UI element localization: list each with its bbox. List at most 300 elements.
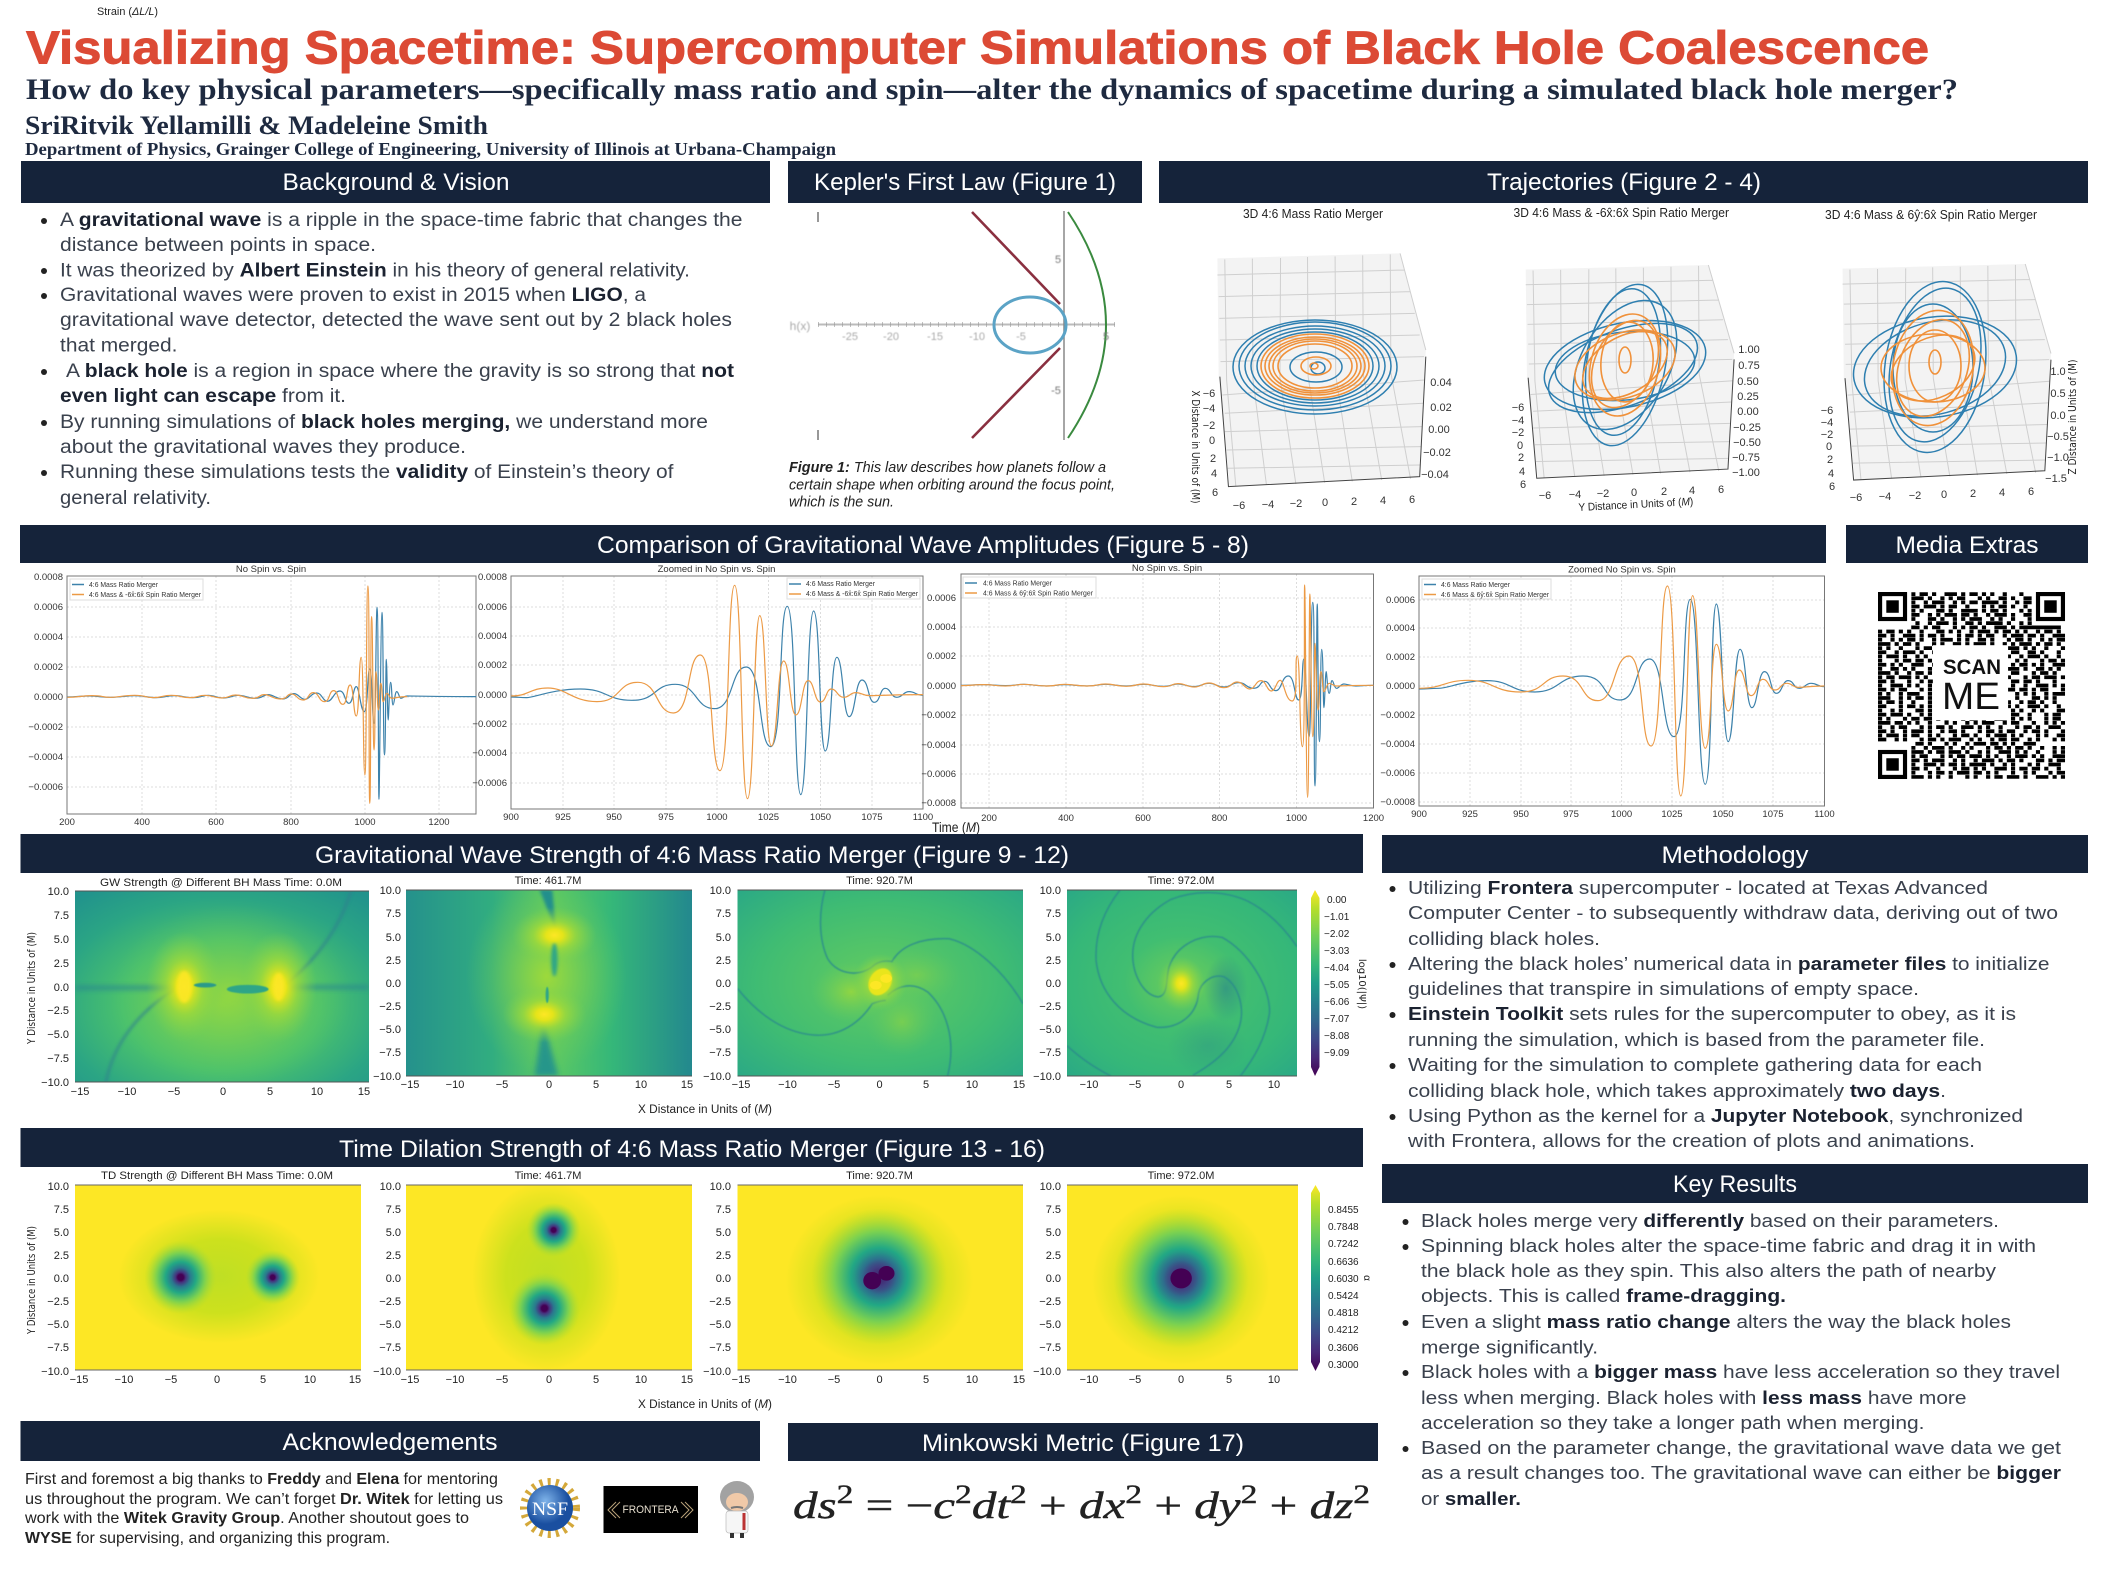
chart: 3D trajectory, orthogonal spin: 6 <box>2028 486 2034 498</box>
chart: 3D trajectory, no spin: −0.04 <box>1421 469 1449 481</box>
chart: zoomed no spin vs anti-aligned spin: 975 <box>658 812 674 823</box>
chart: zoomed no spin vs anti-aligned spin: 1100 <box>913 812 933 823</box>
subtitle: research question: How do key physical parameters—specifically mass ratio and spin—alter the dynamics of spacetime during a simulated black hole merger? <box>26 73 1958 106</box>
chart: no spin vs orthogonal spin: 600 <box>1135 813 1151 824</box>
legend: 4:6 Mass & -6x̂:6x̂ Spin Ratio Merger <box>89 590 201 599</box>
heatmap: TD t=461.7: 5 <box>593 1374 599 1386</box>
text block: background bullets: A gravitational wave is a ripple in the space-time fabric that changes the <box>60 210 742 231</box>
legend: 4:6 Mass & -6x̂:6x̂ Spin Ratio Merger <box>806 589 918 598</box>
colorbar: TD: 0.8455 <box>1328 1205 1359 1216</box>
heatmap: TD t=920.7: 5.0 <box>716 1227 731 1239</box>
heading: Minkowski metric <box>788 1423 1378 1461</box>
text block: background bullets: A black hole is a region in space where the gravity is so strong that not <box>66 361 735 382</box>
heatmap: GW t=0: 0 <box>220 1086 226 1098</box>
heatmap: GW t=0: −15 <box>71 1086 89 1098</box>
colorbar: TD: 0.6030 <box>1328 1274 1359 1285</box>
heading: trajectories: Trajectories (Figure 2 - 4) <box>1487 169 1761 196</box>
chart: no spin vs orthogonal spin: 1000 <box>1286 813 1307 824</box>
text block: thanks: WYSE for supervising, and organizing this program. <box>25 1530 390 1547</box>
chart: 3D trajectory, no spin: 4 <box>1211 468 1217 480</box>
chart: no spin vs anti-aligned spin: 600 <box>208 817 224 828</box>
chart: zoomed no spin vs anti-aligned spin: 0.0006 <box>478 602 507 613</box>
chart: no spin vs orthogonal spin: 0.0002 <box>927 651 956 662</box>
legend: 4:6 Mass & 6ŷ:6x̂ Spin Ratio Merger <box>983 588 1093 598</box>
chart: 3D trajectory, no spin: −4 <box>1262 499 1274 511</box>
chart: 3D trajectory, anti-aligned spin: Y Distance in Units of (M) <box>1578 496 1694 514</box>
icon: QR code: SCAN <box>1943 656 2001 679</box>
heatmap: TD t=972: 2.5 <box>1046 1250 1061 1262</box>
chart: 3D trajectory, no spin: X Distance in Units of (M) <box>1189 390 1201 504</box>
heading: key results: Key Results <box>1673 1171 1797 1198</box>
heading: trajectories <box>1159 161 2088 203</box>
heatmap: TD t=920.7: −5 <box>828 1374 840 1386</box>
heatmap: TD t=972: 10 <box>1268 1374 1280 1386</box>
chart: conic sections: -5 <box>1051 385 1061 397</box>
heatmap: GW t=972: −2.5 <box>1039 1001 1061 1013</box>
chart: 3D trajectory, orthogonal spin: 4 <box>1828 468 1834 480</box>
chart: zoomed no spin vs anti-aligned spin: 925 <box>555 812 571 823</box>
chart: 3D trajectory, no spin: 0.00 <box>1428 424 1450 436</box>
heatmap: TD t=920.7: 7.5 <box>716 1204 731 1216</box>
colorbar: TD: 0.6636 <box>1328 1257 1359 1268</box>
chart: zoomed no spin vs orthogonal spin: 900 <box>1411 809 1427 820</box>
heatmap: GW t=461.7: −2.5 <box>379 1001 401 1013</box>
chart: 3D trajectory, no spin: 6 <box>1409 494 1415 506</box>
text block: methodology bullets: Altering the black holes’ numerical data in parameter files to initialize <box>1408 953 2050 974</box>
chart: zoomed no spin vs anti-aligned spin <box>472 564 933 823</box>
heatmap: GW t=0: 15 <box>358 1086 370 1098</box>
colorbar: GW: 0.00 <box>1327 895 1347 906</box>
heatmap: GW t=0: −5 <box>168 1086 180 1098</box>
chart: conic sections <box>790 211 1115 440</box>
heatmap: GW t=0: 5 <box>267 1086 273 1098</box>
chart: zoomed no spin vs orthogonal spin: 1025 <box>1661 809 1683 820</box>
chart: conic sections: -20 <box>883 331 899 343</box>
colorbar: GW <box>1311 890 1367 1076</box>
equation: spacetime interval: dx <box>1079 1485 1125 1527</box>
heading: background and vision <box>21 161 770 203</box>
heatmap: TD t=920.7: −10.0 <box>703 1366 731 1378</box>
heatmap: TD t=0: TD Strength @ Different BH Mass Time: 0.0M <box>101 1170 333 1182</box>
chart: zoomed no spin vs orthogonal spin: 950 <box>1513 809 1529 820</box>
panel: methodology <box>1382 835 2088 1151</box>
panel: media extras <box>1846 525 2088 779</box>
chart: 3D trajectory, anti-aligned spin: 0.75 <box>1738 360 1760 372</box>
heatmap: TD t=0: −5 <box>165 1374 177 1386</box>
legend: 4:6 Mass Ratio Merger <box>89 580 158 589</box>
heatmap: TD t=920.7: −10 <box>778 1374 797 1386</box>
chart: zoomed no spin vs anti-aligned spin: 0.0002 <box>478 660 507 671</box>
heading: acknowledgements <box>20 1421 760 1461</box>
chart: 3D trajectory, no spin: 3D 4:6 Mass Ratio Merger <box>1243 207 1383 221</box>
chart: zoomed no spin vs orthogonal spin: 1100 <box>1814 809 1835 820</box>
chart: 3D trajectory, orthogonal spin: 3D 4:6 Mass & 6ŷ:6x̂ Spin Ratio Merger <box>1825 208 2037 222</box>
chart: 3D trajectory, orthogonal spin: −6 <box>1850 492 1862 504</box>
colorbar: TD: 0.4818 <box>1328 1308 1359 1319</box>
equation: spacetime interval: = − <box>853 1485 933 1527</box>
heatmap: GW t=972: 0 <box>1178 1079 1184 1091</box>
chart: 3D trajectory, orthogonal spin: 6 <box>1829 481 1835 493</box>
chart: 3D trajectory, orthogonal spin: −1.0 <box>2047 452 2069 464</box>
heading: TD strength <box>20 1128 1363 1167</box>
heatmap: GW t=972 <box>1033 875 1297 1091</box>
panel: key results <box>1382 1164 2088 1509</box>
heatmap: TD t=461.7 <box>373 1170 693 1386</box>
heatmap: GW t=0: 2.5 <box>54 958 69 970</box>
authors: SriRitvik Yellamilli & Madeleine Smith <box>25 111 489 140</box>
colorbar: GW: log10(|Ψ|) <box>1356 959 1367 1009</box>
heatmap: GW t=920.7: −2.5 <box>709 1001 731 1013</box>
chart: 3D trajectory, no spin: −6 <box>1203 388 1215 400</box>
heatmap: GW t=0: 7.5 <box>54 910 69 922</box>
colorbar: TD: 0.3000 <box>1328 1360 1359 1371</box>
chart: no spin vs anti-aligned spin: −0.0006 <box>28 782 63 793</box>
equation: spacetime interval: 2 <box>1125 1480 1142 1509</box>
legend <box>787 578 920 599</box>
text block: key results bullets: Even a slight mass ratio change alters the way the black holes <box>1421 1311 2011 1332</box>
chart: no spin vs anti-aligned spin: 0.0006 <box>34 602 63 613</box>
heatmap: TD t=0: Y Distance in Units of (M) <box>26 1226 38 1335</box>
caption: figure 1: Figure 1: This law describes how planets follow a <box>789 460 1106 476</box>
heatmap: GW t=920.7 <box>703 875 1025 1091</box>
icon: Einstein cartoon <box>720 1481 754 1538</box>
heatmap: TD t=0: 0.0 <box>54 1273 69 1285</box>
heatmap: TD t=920.7: −15 <box>732 1374 750 1386</box>
heatmap: GW t=461.7: −10.0 <box>373 1071 401 1083</box>
chart: 3D trajectory, orthogonal spin: 4 <box>1999 487 2005 499</box>
chart: zoomed no spin vs orthogonal spin: −0.0006 <box>1380 768 1415 779</box>
heatmap: GW t=920.7: −15 <box>732 1079 750 1091</box>
heatmap: TD t=461.7: 5.0 <box>386 1227 401 1239</box>
text block: background bullets: that merged. <box>60 336 178 356</box>
chart: zoomed no spin vs anti-aligned spin: 0.0004 <box>478 631 507 642</box>
caption: figure 1 <box>789 460 1115 510</box>
axis label: time: Time (M) <box>932 819 980 835</box>
heading: GW strength: Gravitational Wave Strength of 4:6 Mass Ratio Merger (Figure 9 - 12) <box>315 842 1069 869</box>
chart: 3D trajectory, orthogonal spin: 2 <box>1827 454 1833 466</box>
heatmap: TD t=972: −5 <box>1129 1374 1141 1386</box>
heatmap: TD t=920.7: −5.0 <box>709 1319 731 1331</box>
heatmap: GW t=461.7: −10 <box>446 1079 464 1091</box>
chart: no spin vs anti-aligned spin: 1200 <box>428 817 450 828</box>
chart: 3D trajectory, orthogonal spin: −6 <box>1821 405 1833 417</box>
chart: 3D trajectory, orthogonal spin: −4 <box>1821 417 1833 429</box>
chart: 3D trajectory, anti-aligned spin: 0 <box>1517 440 1523 452</box>
chart: zoomed no spin vs orthogonal spin: −0.0008 <box>1380 797 1415 808</box>
equation: spacetime interval: c <box>933 1485 955 1527</box>
heatmap: GW t=0: −5.0 <box>47 1029 69 1041</box>
heatmap: GW t=0: Y Distance in Units of (M) <box>26 932 38 1045</box>
heatmap: GW t=972: −10.0 <box>1033 1071 1061 1083</box>
equation: spacetime interval: + <box>1142 1485 1194 1527</box>
chart: no spin vs anti-aligned spin: 800 <box>283 817 299 828</box>
heatmap: TD t=0: 15 <box>349 1374 361 1386</box>
chart: 3D trajectory, no spin: 0 <box>1209 435 1215 447</box>
chart: conic sections: h(x) <box>790 319 810 333</box>
heatmap: GW t=0: 10.0 <box>48 886 69 898</box>
text block: background bullets: even light can escape from it. <box>60 386 346 407</box>
heatmap: GW t=920.7: 10 <box>966 1079 978 1091</box>
chart: 3D trajectory, anti-aligned spin: −4 <box>1569 489 1581 501</box>
chart: no spin vs orthogonal spin: 0.0000 <box>927 681 956 692</box>
heatmap: GW t=920.7: −5 <box>828 1079 840 1091</box>
panel: Minkowski metric <box>788 1423 1378 1527</box>
chart: zoomed no spin vs anti-aligned spin: 900 <box>503 812 519 823</box>
heatmap: GW t=972: 5 <box>1226 1079 1232 1091</box>
text block: methodology bullets: colliding black holes. <box>1408 928 1600 949</box>
heatmap: TD t=972: −10 <box>1080 1374 1098 1386</box>
heatmap: TD t=461.7: −5 <box>496 1374 508 1386</box>
chart: 3D trajectory, anti-aligned spin: −6 <box>1539 490 1551 502</box>
heading: key results <box>1382 1164 2088 1203</box>
heatmap: TD t=972: −10.0 <box>1033 1366 1061 1378</box>
chart: 3D trajectory, anti-aligned spin: 1.00 <box>1738 344 1760 356</box>
chart: 3D trajectory, anti-aligned spin: −0.25 <box>1733 422 1761 434</box>
colorbar: TD: α <box>1361 1275 1372 1281</box>
heatmap: TD t=972: Time: 972.0M <box>1148 1170 1214 1182</box>
heatmap: TD t=461.7: 15 <box>681 1374 693 1386</box>
heatmap: GW t=972: −7.5 <box>1039 1047 1061 1059</box>
chart: conic sections: -15 <box>927 331 943 343</box>
heatmap: TD t=0: 10 <box>304 1374 316 1386</box>
heatmap: GW t=972: −5 <box>1129 1079 1141 1091</box>
chart: 3D trajectory, orthogonal spin: 0.5 <box>2050 388 2066 400</box>
chart: zoomed no spin vs anti-aligned spin: −0.0006 <box>472 778 507 789</box>
text block: methodology bullets: Einstein Toolkit sets rules for the supercomputer to obey, as it is <box>1408 1003 2016 1024</box>
chart: 3D trajectory, no spin: 0.02 <box>1430 402 1452 414</box>
chart: zoomed no spin vs orthogonal spin: 0.0006 <box>1386 595 1415 606</box>
icon: QR code <box>1878 592 2065 779</box>
colorbar: TD: 0.5424 <box>1328 1291 1359 1302</box>
heatmap: TD t=972: −7.5 <box>1039 1342 1061 1354</box>
legend <box>1422 579 1551 599</box>
chart: 3D trajectory, orthogonal spin: −2 <box>1909 490 1921 502</box>
equation: spacetime interval: 2 <box>837 1480 853 1509</box>
chart: 3D trajectory, anti-aligned spin: 6 <box>1520 479 1526 491</box>
chart: no spin vs orthogonal spin: −0.0002 <box>921 710 956 721</box>
chart: conic sections: 5 <box>1103 331 1109 343</box>
chart: 3D trajectory, orthogonal spin: 0.0 <box>2050 410 2066 422</box>
heatmap: TD t=0: −10 <box>115 1374 133 1386</box>
chart: no spin vs anti-aligned spin: 0.0002 <box>34 662 63 673</box>
colorbar: GW: −8.08 <box>1324 1031 1350 1042</box>
text block: key results bullets: Black holes with a bigger mass have less acceleration so they travel <box>1421 1361 2060 1382</box>
heatmap: TD t=0: −5.0 <box>47 1319 69 1331</box>
heatmap: TD t=920.7: 5 <box>923 1374 929 1386</box>
text block: key results bullets: merge significantly. <box>1421 1336 1598 1358</box>
heatmap: TD t=461.7: 10 <box>635 1374 647 1386</box>
heatmap: GW t=461.7: −5.0 <box>379 1024 401 1036</box>
text block: key results bullets: Based on the parameter change, the gravitational wave data we get <box>1421 1437 2061 1458</box>
colorbar: GW: −5.05 <box>1324 980 1350 991</box>
heatmap: TD t=920.7: −7.5 <box>709 1342 731 1354</box>
heatmap: GW t=0: GW Strength @ Different BH Mass Time: 0.0M <box>100 877 342 889</box>
panel: time dilation strength <box>20 1128 1372 1411</box>
heatmap: GW t=920.7: 5 <box>923 1079 929 1091</box>
chart: zoomed no spin vs anti-aligned spin: 950 <box>606 812 622 823</box>
chart: 3D trajectory, anti-aligned spin: 0 <box>1631 487 1637 499</box>
text block: key results bullets: Spinning black holes alter the space-time fabric and drag it in with <box>1421 1235 2036 1256</box>
colorbar: GW: −6.06 <box>1324 997 1350 1008</box>
text block: key results bullets <box>1402 1210 2061 1509</box>
legend: 4:6 Mass Ratio Merger <box>1441 580 1510 589</box>
icon: NSF logo <box>524 1482 576 1534</box>
icon: Frontera logo <box>604 1486 698 1533</box>
chart: no spin vs anti-aligned spin: 0.0008 <box>34 572 63 583</box>
heatmap: GW t=0 <box>26 877 370 1098</box>
equation: spacetime interval: + <box>1257 1485 1310 1527</box>
heatmap: GW t=920.7: 15 <box>1013 1079 1025 1091</box>
chart: 3D trajectory, orthogonal spin <box>1821 208 2079 504</box>
chart: 3D trajectory, no spin: 4 <box>1380 495 1386 507</box>
heatmap: TD t=461.7: −10.0 <box>373 1366 401 1378</box>
panel: gravitational wave strength <box>20 834 1367 1116</box>
panel: background and vision <box>21 161 770 509</box>
chart: 3D trajectory, anti-aligned spin: −1.00 <box>1732 467 1760 479</box>
heatmap: TD t=461.7: 2.5 <box>386 1250 401 1262</box>
chart: 3D trajectory, anti-aligned spin: 4 <box>1519 466 1525 478</box>
chart: 3D trajectory, no spin: 0 <box>1322 497 1328 509</box>
chart: zoomed no spin vs anti-aligned spin: 1050 <box>810 812 831 823</box>
heatmap: GW t=0: −10.0 <box>41 1077 69 1089</box>
chart: 3D trajectory, no spin: −6 <box>1233 500 1245 512</box>
chart: no spin vs anti-aligned spin: 1000 <box>354 817 376 828</box>
heading: background and vision: Background & Vision <box>282 169 510 196</box>
heatmap: TD t=0: 10.0 <box>48 1181 69 1193</box>
heatmap: TD t=972: 0.0 <box>1046 1273 1061 1285</box>
legend: 4:6 Mass Ratio Merger <box>983 578 1052 588</box>
text block: methodology bullets <box>1390 877 2058 1151</box>
heatmap: TD t=920.7: 0.0 <box>716 1273 731 1285</box>
heatmap: TD t=461.7: 7.5 <box>386 1204 401 1216</box>
chart: 3D trajectory, anti-aligned spin: 0.00 <box>1737 406 1759 418</box>
text block: thanks <box>24 1471 503 1547</box>
heatmap: TD t=972: −5.0 <box>1039 1319 1061 1331</box>
heatmap: GW t=920.7: 5.0 <box>716 932 731 944</box>
colorbar: GW: −2.02 <box>1324 929 1350 940</box>
chart: 3D trajectory, anti-aligned spin: −0.50 <box>1733 437 1761 449</box>
chart: no spin vs orthogonal spin: 0.0006 <box>927 593 956 604</box>
chart: 3D trajectory, no spin: 0.04 <box>1430 377 1452 389</box>
colorbar: TD: 0.7848 <box>1328 1222 1359 1233</box>
heatmap: TD t=461.7: Time: 461.7M <box>515 1170 581 1182</box>
colorbar: TD: 0.3606 <box>1328 1343 1359 1354</box>
chart: 3D trajectory, no spin: 2 <box>1351 496 1357 508</box>
chart: 3D trajectory, anti-aligned spin: −2 <box>1512 427 1524 439</box>
equation: spacetime interval: 2 <box>1010 1480 1027 1509</box>
text block: key results bullets: or smaller. <box>1421 1488 1521 1509</box>
heatmap: TD t=972: 10.0 <box>1040 1181 1061 1193</box>
text block: key results bullets: objects. This is called frame-dragging. <box>1421 1285 1786 1306</box>
chart: zoomed no spin vs orthogonal spin: 1050 <box>1712 809 1734 820</box>
text block: key results bullets: as a result changes too. The gravitational wave can either be bigger <box>1421 1462 2061 1483</box>
heatmap: TD t=972: 5.0 <box>1046 1227 1061 1239</box>
chart: 3D trajectory, anti-aligned spin: 4 <box>1689 485 1695 497</box>
heatmap: GW t=972: 2.5 <box>1046 955 1061 967</box>
text block: background bullets: distance between points in space. <box>60 235 376 256</box>
chart: 3D trajectory, no spin <box>1189 207 1452 512</box>
heatmap: GW t=972: 10 <box>1268 1079 1280 1091</box>
heading: amplitudes: Comparison of Gravitational Wave Amplitudes (Figure 5 - 8) <box>597 532 1249 559</box>
chart: 3D trajectory, orthogonal spin: −4 <box>1879 491 1891 503</box>
affiliation: Department of Physics, Grainger College of Engineering, University of Illinois at Urbana-Champaign <box>25 139 836 159</box>
heatmap: TD t=920.7: 0 <box>876 1374 883 1386</box>
heading: acknowledgements: Acknowledgements <box>282 1429 498 1456</box>
chart: no spin vs orthogonal spin: No Spin vs. Spin <box>1132 563 1202 574</box>
chart: no spin vs anti-aligned spin: 0.0004 <box>34 632 63 643</box>
heatmap: TD t=0: 5 <box>260 1374 266 1386</box>
text block: key results bullets: acceleration so they take a longer path when merging. <box>1421 1412 1924 1433</box>
icon: NSF logo: NSF <box>532 1499 568 1520</box>
chart: zoomed no spin vs orthogonal spin: 975 <box>1563 809 1579 820</box>
legend: 4:6 Mass & 6ŷ:6x̂ Spin Ratio Merger <box>1441 590 1549 599</box>
chart: zoomed no spin vs orthogonal spin: −0.0004 <box>1380 739 1415 750</box>
chart: zoomed no spin vs orthogonal spin: 1075 <box>1762 809 1784 820</box>
heatmap: GW t=461.7: 0 <box>546 1079 552 1091</box>
legend <box>963 577 1096 598</box>
chart: no spin vs orthogonal spin: −0.0008 <box>921 798 956 809</box>
chart: zoomed no spin vs anti-aligned spin: 1075 <box>861 812 883 823</box>
equation: spacetime interval: 2 <box>1241 1480 1257 1509</box>
text block: methodology bullets: Computer Center - to subsequently withdraw data, deriving out of two <box>1408 902 2058 923</box>
panel: Kepler's first law <box>788 161 1142 510</box>
panel: acknowledgements <box>20 1421 760 1547</box>
chart: zoomed no spin vs anti-aligned spin: −0.0002 <box>472 719 507 730</box>
chart: zoomed no spin vs anti-aligned spin: 0.0000 <box>478 690 507 701</box>
chart: no spin vs orthogonal spin: −0.0006 <box>921 769 956 780</box>
chart: no spin vs anti-aligned spin <box>28 564 476 828</box>
heatmap: TD t=0: 5.0 <box>54 1227 69 1239</box>
heatmap: TD t=0: −2.5 <box>47 1296 69 1308</box>
chart: zoomed no spin vs orthogonal spin: 0.0004 <box>1386 623 1415 634</box>
heading: Kepler's first law: Kepler's First Law (Figure 1) <box>814 169 1116 196</box>
heatmap: TD t=972: 0 <box>1178 1374 1184 1386</box>
heatmap: TD t=920.7: 15 <box>1013 1374 1025 1386</box>
chart: zoomed no spin vs anti-aligned spin: 0.0008 <box>478 572 507 583</box>
chart: no spin vs orthogonal spin: 800 <box>1212 813 1227 824</box>
heatmap: TD t=972 <box>1033 1170 1298 1386</box>
chart: 3D trajectory, orthogonal spin: 2 <box>1970 488 1976 500</box>
chart: no spin vs orthogonal spin: 400 <box>1058 813 1074 824</box>
equation: spacetime interval: 2 <box>955 1480 972 1509</box>
heatmap: GW t=0: −10 <box>118 1086 136 1098</box>
heatmap: GW t=920.7: 2.5 <box>716 955 731 967</box>
heatmap: GW t=972: Time: 972.0M <box>1148 875 1214 887</box>
text block: methodology bullets: Utilizing Frontera supercomputer - located at Texas Advanced <box>1408 877 1988 898</box>
colorbar: TD: 0.7242 <box>1328 1239 1359 1250</box>
chart: no spin vs orthogonal spin <box>921 563 1384 835</box>
heatmap: GW t=972: −5.0 <box>1039 1024 1061 1036</box>
chart: 3D trajectory, no spin: 2 <box>1210 453 1216 465</box>
chart: 3D trajectory, no spin: −2 <box>1203 420 1215 432</box>
colorbar: GW: −4.04 <box>1324 963 1350 974</box>
heading: Minkowski metric: Minkowski Metric (Figure 17) <box>922 1430 1244 1457</box>
equation: spacetime interval: ds <box>793 1485 837 1527</box>
heatmap: GW t=461.7: Time: 461.7M <box>515 875 581 887</box>
chart: no spin vs anti-aligned spin: 400 <box>134 817 150 828</box>
heatmap: GW t=461.7: 0.0 <box>386 978 401 990</box>
heatmap: TD t=0: 2.5 <box>54 1250 69 1262</box>
heatmap: TD t=0: −15 <box>70 1374 88 1386</box>
heatmap: TD t=0: −10.0 <box>41 1366 69 1378</box>
colorbar: GW: −9.09 <box>1324 1048 1350 1059</box>
chart: zoomed no spin vs orthogonal spin: 1000 <box>1611 809 1632 820</box>
text block: thanks: work with the Witek Gravity Group . Another shoutout goes to <box>24 1510 469 1527</box>
text block: background bullets: Running these simulations tests the validity of Einstein’s theory of <box>60 462 674 483</box>
chart: zoomed no spin vs orthogonal spin: Zoomed No Spin vs. Spin <box>1568 564 1676 576</box>
heatmap: GW t=972: −10 <box>1080 1079 1098 1091</box>
title: Visualizing Spacetime: Supercomputer Simulations of Black Hole Coalescence <box>26 22 1929 74</box>
